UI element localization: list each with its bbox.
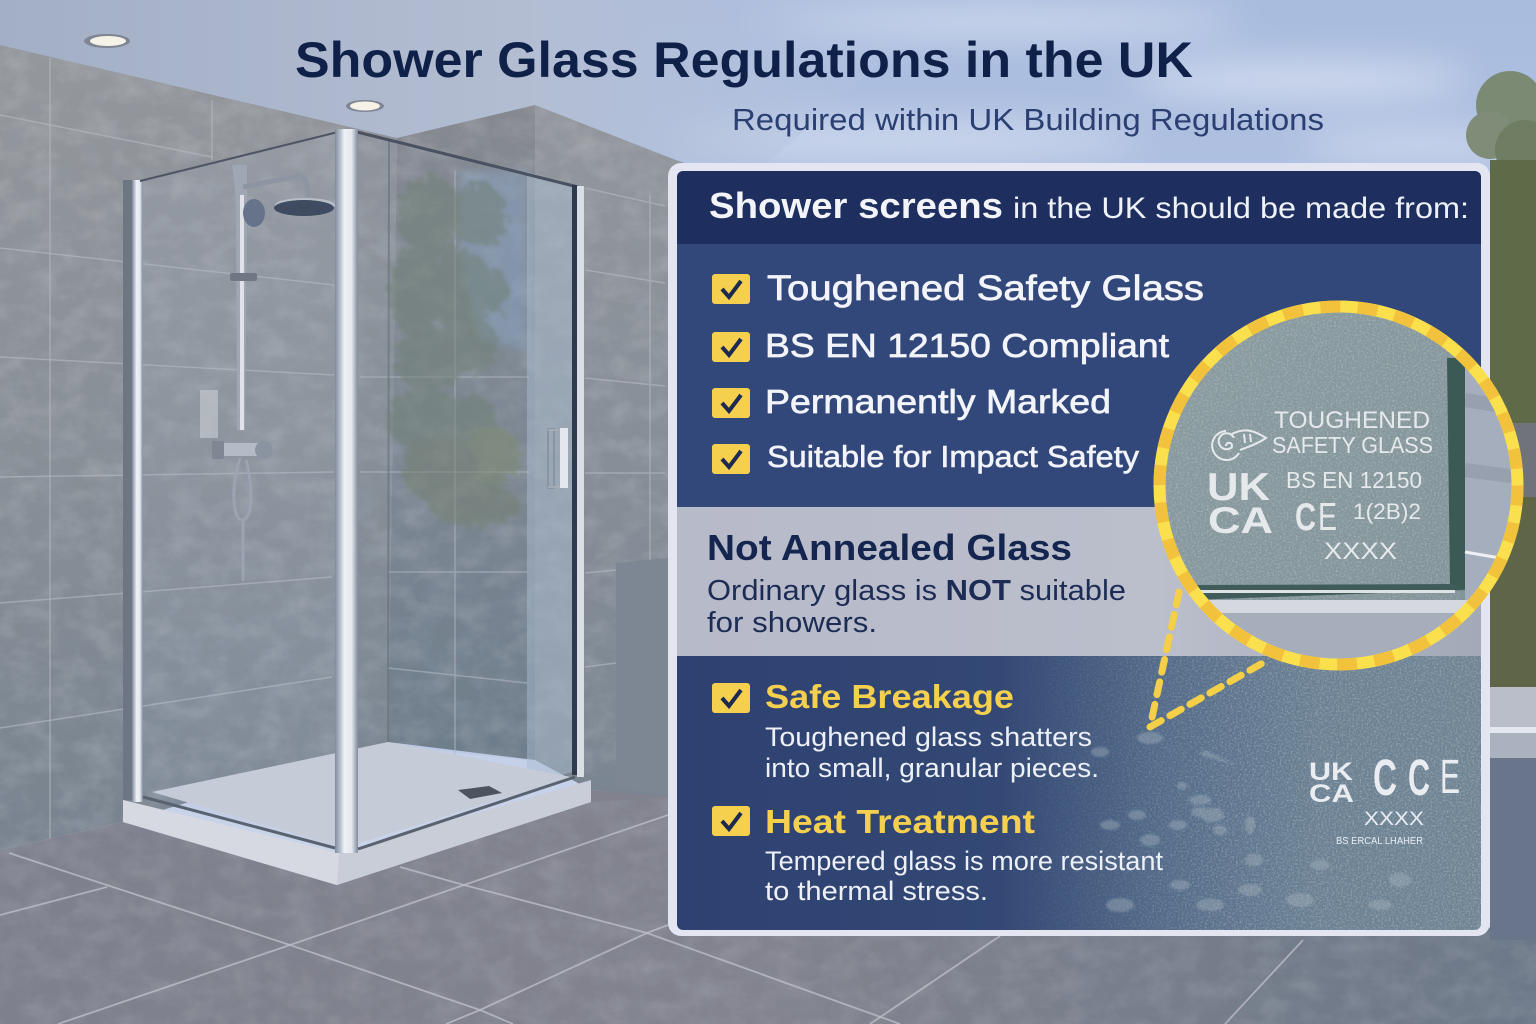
glass certification marks: UK (1309, 758, 1353, 786)
glass certification marks: E (1440, 751, 1460, 804)
checklist item: impact safety: Suitable for Impact Safety (767, 439, 1140, 474)
ceiling lights (84, 34, 384, 112)
lens engraved text: BS EN 12150 (1286, 467, 1422, 493)
section: heat treatment: Tempered glass is more resistant (765, 846, 1163, 876)
glass certification marks: XXXX (1364, 809, 1424, 830)
glass certification marks (1309, 749, 1460, 847)
section: not annealed glass: for showers. (707, 607, 877, 639)
central post (335, 129, 358, 853)
lower glass tint (358, 133, 527, 760)
lens engraved text: 1(2B)2 (1353, 499, 1421, 524)
lens engraved text: SAFETY GLASS (1272, 432, 1433, 458)
checklist item: permanently marked: Permanently Marked (765, 383, 1111, 420)
lens ring dashes (1160, 306, 1518, 664)
floor (0, 790, 1536, 1024)
lower rail (143, 777, 575, 849)
glass certification marks: BS ERCAL LHAHER (1336, 836, 1423, 847)
left wall (0, 45, 397, 850)
glass certification marks: CA (1309, 780, 1354, 808)
rain shower head (274, 198, 335, 216)
lens engraved text: TOUGHENED (1274, 407, 1430, 434)
glass certification marks: C (1373, 749, 1397, 806)
shattered glass pebbles (1091, 732, 1411, 912)
lens engraved text: XXXX (1324, 538, 1397, 565)
lens engraved text: CA (1208, 500, 1273, 541)
lens glass detail (1166, 312, 1512, 658)
pointer: dashed lines from magnifier to glass (1150, 592, 1268, 727)
mixer valve (212, 443, 273, 456)
back corner shadow (388, 140, 389, 742)
tree reflection (387, 175, 520, 527)
shower riser (212, 165, 335, 581)
section: heat treatment: Heat Treatment (765, 803, 1035, 840)
section: safe breakage: Toughened glass shatters (765, 722, 1092, 752)
tree foliage on the right (1466, 71, 1536, 687)
lens engraved text: UK (1207, 466, 1270, 509)
hose (234, 458, 251, 581)
panel border (668, 163, 1490, 936)
lens fill (1158, 306, 1518, 666)
left wall channel (123, 180, 143, 802)
shower tray (123, 742, 591, 885)
hand shower (243, 199, 265, 227)
wall tile joints (0, 58, 665, 845)
section: not annealed glass (707, 527, 1126, 639)
icon: manufacturer spiral eye logo (1212, 430, 1266, 460)
lens engraved text (1207, 407, 1433, 565)
section: heat treatment (712, 803, 1163, 906)
checklist item: toughened safety glass: Toughened Safety Glass (767, 269, 1204, 308)
title: Shower Glass Regulations in the UK (295, 32, 1193, 88)
sky reflection in right pane (460, 170, 527, 350)
panel heading: Shower screens (709, 185, 1003, 226)
panel heading: in the UK should be made from: (1013, 192, 1469, 225)
right wall (535, 105, 690, 800)
panel sections (677, 171, 1481, 930)
door handle (548, 428, 568, 488)
section: safe breakage: into small, granular pieces. (765, 753, 1099, 783)
subtitle: Required within UK Building Regulations (732, 102, 1324, 137)
checklist item: compliant: BS EN 12150 Compliant (765, 327, 1169, 364)
ceiling (0, 0, 950, 170)
right post (572, 185, 584, 777)
lens engraved text: C (1295, 496, 1316, 539)
section: heat treatment: to thermal stress. (765, 876, 988, 906)
section: not annealed glass: Ordinary glass is NOT suitable (707, 575, 1126, 607)
lens ring (1160, 306, 1518, 664)
magnifier: toughened glass mark close-up (1150, 300, 1530, 683)
top rail right (357, 132, 578, 187)
floor tile joints (0, 815, 1303, 1024)
wall plate (200, 390, 218, 438)
clouds (660, 8, 1536, 158)
shower enclosure (123, 129, 591, 885)
wall texture (0, 45, 690, 850)
section: not annealed glass: Not Annealed Glass (707, 527, 1072, 568)
right glass pane strip (527, 172, 572, 785)
glass certification marks: C (1408, 749, 1430, 806)
left glass pane (143, 133, 338, 848)
lens engraved text: E (1318, 496, 1337, 539)
bathtub (1490, 687, 1536, 940)
floor texture (0, 797, 1536, 1024)
section: safe breakage: Safe Breakage (765, 678, 1014, 715)
top rail left (140, 132, 338, 181)
back wall (388, 105, 535, 760)
panel: shower screens information (668, 163, 1490, 936)
wall ledge (616, 558, 668, 796)
section: safe breakage (712, 678, 1099, 783)
